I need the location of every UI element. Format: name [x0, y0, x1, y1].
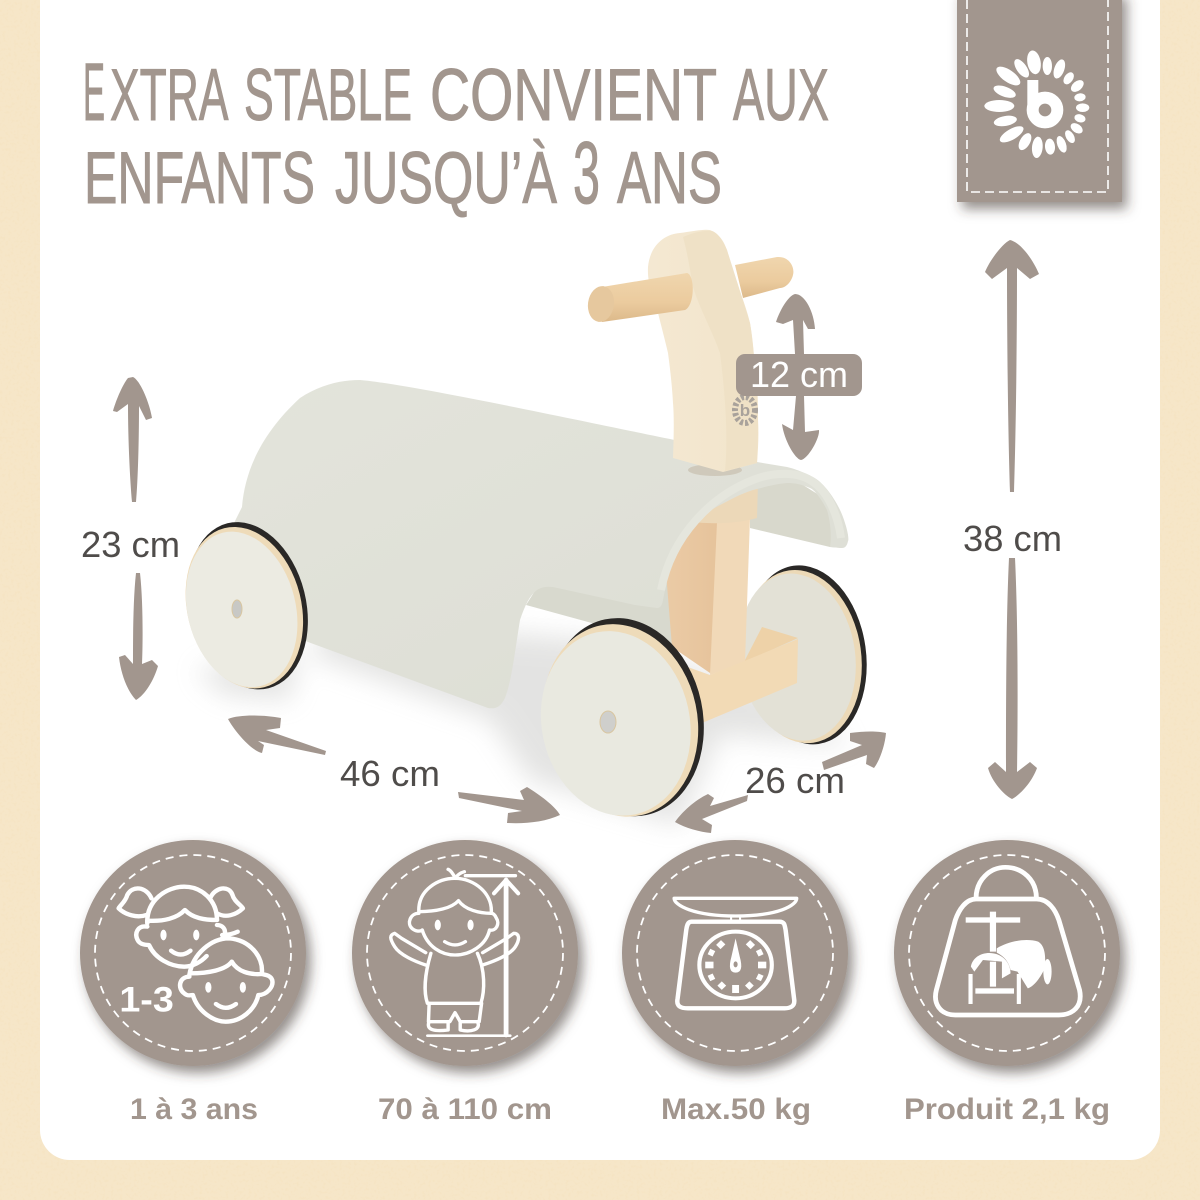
- label: 23 cm: 23 cm: [81, 524, 180, 565]
- title: [83, 47, 829, 222]
- front wheel: [522, 603, 722, 833]
- title: CONVIENT: [430, 55, 716, 136]
- arrow: 12 cm height: [776, 294, 819, 460]
- back right wheel: [727, 557, 878, 753]
- icon: kitchen scale: [674, 898, 797, 1008]
- label: Max.50 kg: Max.50 kg: [661, 1093, 811, 1126]
- title: JUSQU’À: [335, 138, 557, 219]
- badge: age 1 to 3: [80, 840, 306, 1066]
- rear wheel screw: [232, 600, 242, 618]
- arrow: 26 cm width: [675, 732, 886, 833]
- icon: weight with toy silhouette: [936, 867, 1080, 1015]
- label: 38 cm: 38 cm: [963, 518, 1062, 559]
- title: E: [83, 47, 105, 138]
- title: 3: [573, 123, 600, 222]
- icon: two children faces: [119, 887, 272, 1022]
- seat underside: [526, 475, 848, 645]
- seat body: [233, 380, 848, 708]
- icon: two children faces: 1-3: [119, 980, 174, 1020]
- seat front edge highlight: [661, 474, 841, 590]
- label: 12 cm: 12 cm: [750, 354, 848, 395]
- icon: brand flower logo: [984, 49, 1089, 158]
- badge: product weight 2,1 kg: [894, 840, 1120, 1066]
- title: XTRA: [110, 55, 229, 136]
- title: ENFANTS: [84, 138, 315, 219]
- arrow: 23 cm height: [113, 377, 158, 700]
- title: AUX: [733, 55, 829, 136]
- steering column: b: [740, 401, 750, 420]
- floor shadow: [195, 620, 850, 825]
- label: 26 cm: 26 cm: [745, 760, 845, 801]
- product: wooden ride-on toy: [168, 230, 878, 833]
- logo bookmark tag: [957, 0, 1122, 202]
- label: Produit 2,1 kg: Produit 2,1 kg: [904, 1093, 1110, 1126]
- label: 46 cm: 46 cm: [340, 753, 440, 794]
- label: 1 à 3 ans: 1 à 3 ans: [130, 1093, 258, 1126]
- steering column: [586, 230, 793, 476]
- icon: child with height gauge: [391, 869, 519, 1036]
- arrow: 46 cm length: [228, 716, 560, 823]
- arrow: 38 cm height: [985, 240, 1039, 799]
- title: ANS: [617, 138, 722, 219]
- frame post and axle bar: [665, 482, 798, 723]
- badge: height 70 to 110 cm: [352, 840, 578, 1066]
- front wheel screw: [600, 711, 616, 733]
- badge: max weight 50 kg: [622, 840, 848, 1066]
- rear left wheel: [168, 509, 325, 703]
- label: 70 à 110 cm: 70 à 110 cm: [378, 1093, 552, 1126]
- title: STABLE: [244, 55, 412, 136]
